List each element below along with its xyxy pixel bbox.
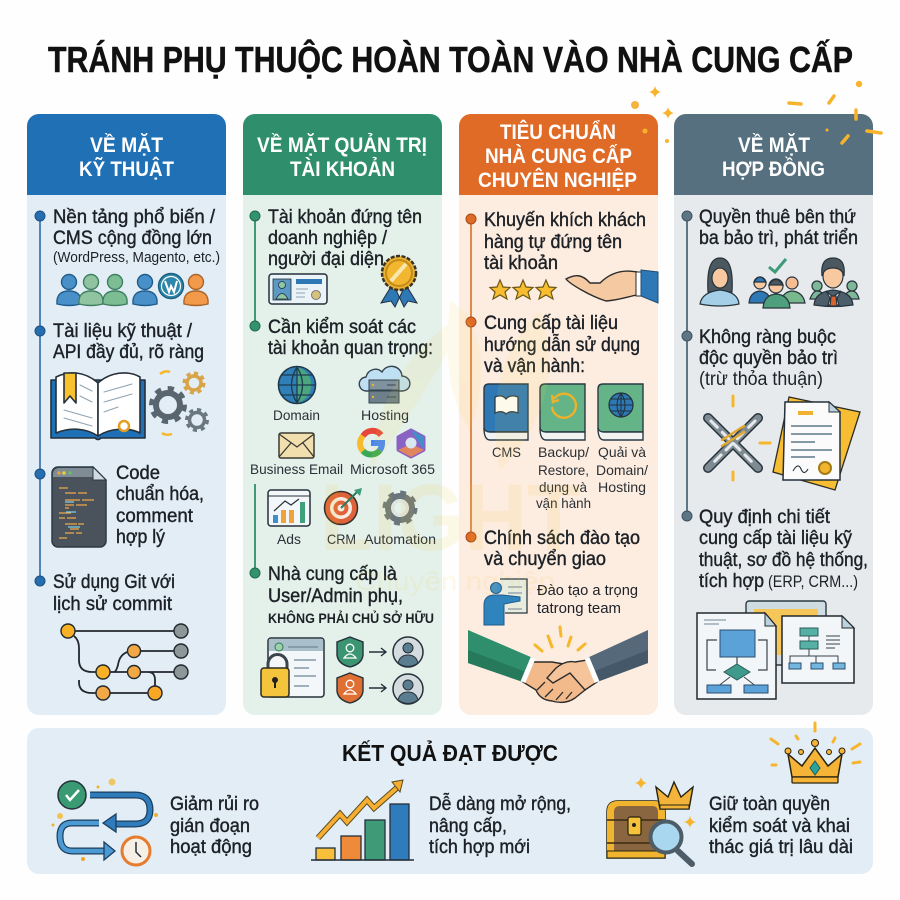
text: quy định chi tiết: thuật, sơ đồ hệ thống, [699,550,868,571]
text: cung cấp tài liệu: Cung cấp tài liệu [484,313,618,334]
text: cung cấp tài liệu: và vận hành: [484,356,585,377]
text: không ràng buộc: độc quyền bảo trì [699,348,838,369]
text: khuyến khích khách hàng: hàng tự đứng tên [484,232,622,253]
watermark: LIGHT [320,465,580,571]
watermark [320,300,580,596]
icon: locked document [261,638,324,697]
icon: businessman [810,258,859,306]
timeline [682,211,692,521]
panel header: quản trị tài khoản: TÀI KHOẢN [290,158,395,181]
text: nhà cung cấp là user/admin phụ: Nhà cung cấp là [268,564,397,585]
label: ads: Ads [277,531,301,547]
text: không ràng buộc [699,327,838,390]
text: đào tạo trong team: tatrong team [537,600,621,617]
text: cung cấp tài liệu [484,313,640,377]
icon: contract documents [773,397,860,490]
text: nền tảng phổ biến: (WordPress, Magento, etc.) [53,249,220,266]
decorative sparkles above panels [631,81,881,143]
text: nhà cung cấp là user/admin phụ: User/Admin phụ, [268,586,403,607]
text: nền tảng phổ biến: Nền tảng phổ biến / [53,207,216,228]
icon: hosting cloud [359,366,410,403]
text: đào tạo trong team [537,582,638,617]
text: tài liệu kỹ thuật: API đầy đủ, rõ ràng [53,342,204,363]
icon: woman [700,258,739,306]
text: quy định chi tiết: tích hợp [699,571,764,592]
text: tài liệu kỹ thuật [53,321,204,363]
icon: CMS manual [484,384,528,440]
icon: automation gear [386,494,414,522]
text: sử dụng Git [53,572,175,615]
text: dễ dàng mở rộng: Dễ dàng mở rộng, [429,793,571,815]
watermark: Chuyên nghiệp [355,566,555,596]
text: chính sách đào tạo: và chuyển giao [484,549,606,570]
icon: open hand [566,270,658,303]
text: dễ dàng mở rộng: nâng cấp, [429,816,507,837]
panel: tiêu chuẩn nhà cung cấp chuyên nghiệp [459,114,658,715]
panel: về mặt kỹ thuật [27,114,226,715]
label: domain hosting [596,444,648,495]
text: giảm rủi ro: Giảm rủi ro [170,794,259,815]
text: quy định chi tiết: cung cấp tài liệu kỹ [699,528,852,549]
text: giữ toàn quyền: thác giá trị lâu dài [709,837,853,858]
icon: crossed broken chains [708,396,770,480]
text: nhà cung cấp là user/admin phụ: KHÔNG PHẢI CHỦ SỞ HỮU [268,609,434,626]
text: quyền thuê bên thứ ba [699,207,858,249]
panel header: quản trị tài khoản [243,114,442,195]
panel: kết quả đạt được [27,723,873,874]
text: code chuẩn hóa: Code [116,463,160,484]
label: automation: Automation [364,531,436,547]
icon: handshake [468,627,648,702]
text: dễ dàng mở rộng: tích hợp mới [429,837,530,858]
timeline [35,211,45,586]
icon: growth bar chart [311,780,414,860]
panel header: tiêu chuẩn: NHÀ CUNG CẤP [485,145,632,168]
panel header: quản trị tài khoản: VỀ MẶT QUẢN TRỊ [257,134,427,157]
icon: trainer and board [484,579,527,625]
label: backup restore [536,444,591,511]
text: code chuẩn hóa: comment [116,506,194,527]
text: giảm rủi ro: gián đoạn [170,816,250,837]
label: domain hosting: Quải và [598,444,646,460]
icon: CRM target [324,488,362,524]
text: cần kiểm soát: Cần kiểm soát các [268,317,416,338]
icon: domain hosting manual [598,384,643,440]
icon: ID card [269,274,327,304]
panel header: kỹ thuật: VỀ MẶT [90,134,163,157]
text: code chuẩn hóa [116,463,204,548]
icon: backup manual [540,384,585,440]
heading: kết quả đạt được: KẾT QUẢ ĐẠT ĐƯỢC [342,738,558,766]
label: CMS: CMS [492,444,521,460]
text: code chuẩn hóa: hợp lý [116,527,165,548]
label: business email: Business Email [250,461,343,477]
text: sử dụng Git: Sử dụng Git với [53,572,175,593]
icon: treasure chest, crown and magnifier [607,777,696,864]
icon: Google logo [360,431,382,455]
text: cung cấp tài liệu: hướng dẫn sử dụng [484,334,640,356]
label: hosting: Hosting [361,407,409,423]
label: backup restore: vận hành [536,495,591,511]
panel header: hợp đồng: VỀ MẶT [738,134,810,157]
icon: domain globe [278,366,316,404]
text: quy định chi tiết: (ERP, CRM...) [768,573,858,591]
panel header: tiêu chuẩn [459,114,658,195]
text: tài khoản đứng tên: Tài khoản đứng tên [268,207,422,228]
label: microsoft 365: Microsoft 365 [350,461,435,477]
label: crm: CRM [327,531,356,547]
text: tài khoản đứng tên [268,207,422,270]
icon: shields and users [337,637,423,704]
panel: về mặt quản trị tài khoản [243,114,442,715]
icon: system diagrams [697,601,854,699]
icon: golden crown [771,723,860,783]
panel header: hợp đồng: HỢP ĐỒNG [722,157,825,181]
text: không ràng buộc: Không ràng buộc [699,327,836,348]
text: dễ dàng mở rộng [429,793,571,858]
text: cần kiểm soát: tài khoản quan trọng: [268,338,433,359]
text: nhà cung cấp là user/admin phụ [268,564,434,626]
text: sử dụng Git: lịch sử commit [53,594,173,615]
text: quy định chi tiết: Quy định chi tiết [699,507,831,528]
icon: open book [51,373,145,440]
icon: team with check [749,259,805,308]
text: giữ toàn quyền: kiểm soát và khai [709,816,850,837]
text: khuyến khích khách hàng [484,210,646,274]
label: domain hosting: Domain/ [596,462,648,478]
icon: ads dashboard [268,490,310,526]
panel header: tiêu chuẩn: CHUYÊN NGHIỆP [478,168,637,192]
label: backup restore: Restore, [538,462,589,478]
text: khuyến khích khách hàng: Khuyến khích khách [484,210,646,231]
text: quyền thuê bên thứ ba: Quyền thuê bên thứ [699,207,856,228]
icon: three stars [490,280,556,299]
text: không ràng buộc: (trừ thỏa thuận) [699,369,823,390]
text: giảm rủi ro: hoạt động [170,837,252,858]
panel header: kỹ thuật [27,114,226,195]
panel: về mặt hợp đồng [674,114,873,715]
icon: git graph [61,624,188,700]
timeline [466,214,476,542]
icon: code document [52,467,106,547]
text: tài khoản đứng tên: doanh nghiệp / [268,228,388,249]
text: tài khoản đứng tên: người đại diện [268,249,384,270]
text: code chuẩn hóa: chuẩn hóa, [116,484,204,505]
text: đào tạo trong team: Đào tạo a trọng [537,582,638,599]
icon: gears [152,371,207,435]
text: giữ toàn quyền: Giữ toàn quyền [709,794,830,815]
text: cần kiểm soát [268,317,433,359]
icon: Microsoft 365 logo [398,430,424,457]
icon: process flow with check and clock [52,778,158,865]
icon: community people and WordPress [57,274,208,306]
text: giảm rủi ro [170,794,259,858]
text: quyền thuê bên thứ ba: ba bảo trì, phát triển [699,228,858,249]
text: khuyến khích khách hàng: tài khoản [484,253,558,274]
icon: award badge [381,256,417,307]
text: nền tảng phổ biến: CMS cộng đồng lớn [53,228,212,249]
label: domain: Domain [273,407,320,423]
icon: email envelope [279,433,314,458]
panel header: tiêu chuẩn: TIÊU CHUẨN [500,120,616,144]
label: backup restore: dụng và [539,479,587,495]
text: nền tảng phổ biến [53,207,220,266]
panel header: kỹ thuật: KỸ THUẬT [79,157,174,181]
label: domain hosting: Hosting [598,479,646,495]
label: backup restore: Backup/ [538,444,589,460]
panel header: hợp đồng [674,114,873,195]
text: chính sách đào tạo [484,528,640,570]
text: quy định chi tiết [699,507,868,592]
text: chính sách đào tạo: Chính sách đào tạo [484,528,640,549]
text: tài liệu kỹ thuật: Tài liệu kỹ thuật / [53,321,193,342]
timeline [250,211,260,578]
text: giữ toàn quyền [709,794,853,858]
